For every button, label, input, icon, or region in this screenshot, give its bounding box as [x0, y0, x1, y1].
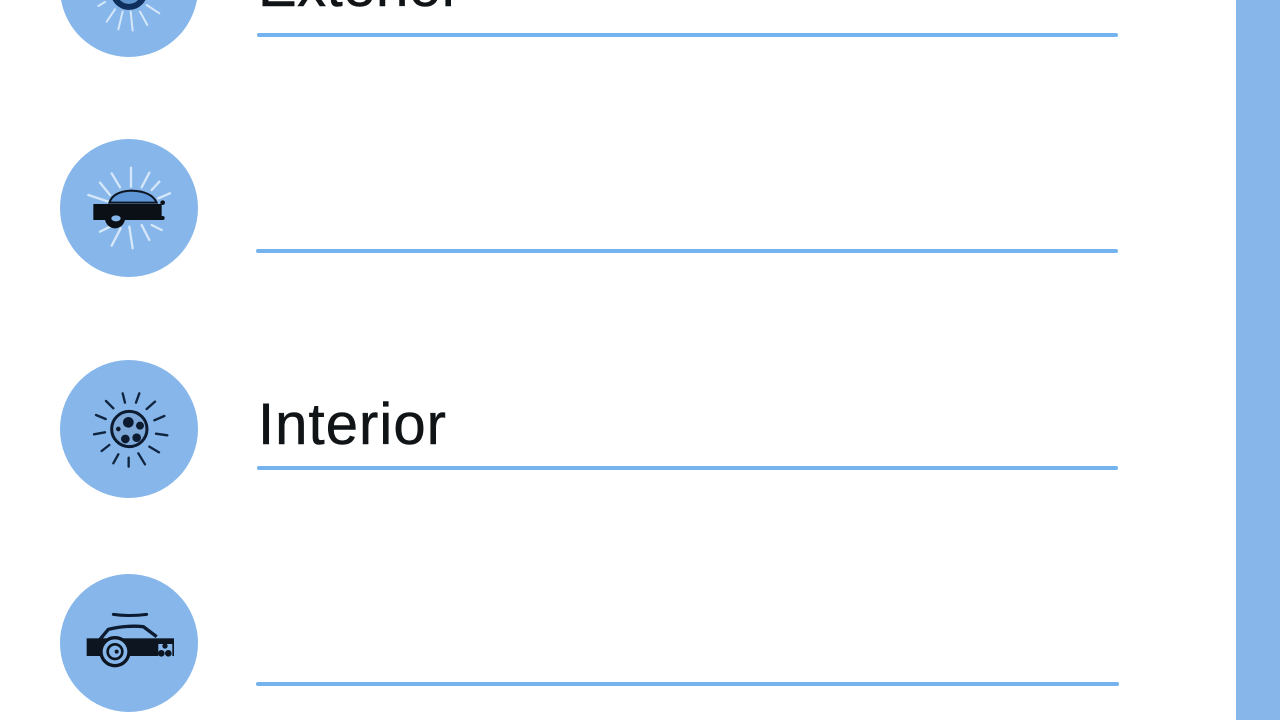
icon: exterior, cropped sun and wheel badge: [60, 0, 198, 57]
divider line: fourth row: [256, 682, 1119, 686]
divider line: Exterior: [257, 33, 1118, 37]
right sidebar band: [1236, 0, 1280, 720]
icon: car with light rays badge: [60, 139, 198, 277]
icon: interior, round sun badge: [60, 360, 198, 498]
divider line: Interior: [257, 466, 1118, 470]
divider line: second row: [256, 249, 1118, 253]
icon: car with wheel badge: [60, 574, 198, 712]
heading: Interior: Interior: [258, 392, 446, 457]
